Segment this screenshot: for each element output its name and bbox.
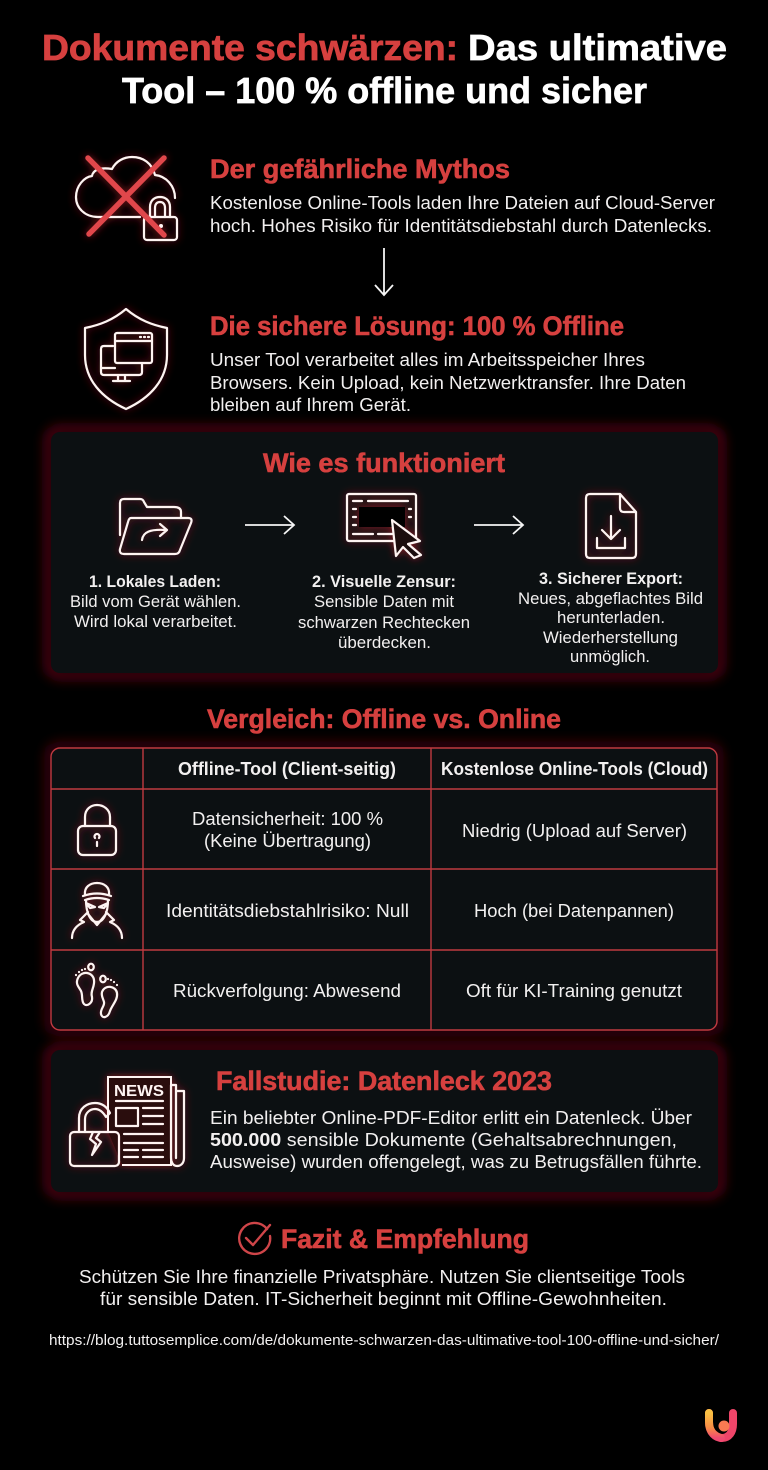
table header: Kostenlose Online-Tools (Cloud) xyxy=(441,759,708,779)
icon: redacting window with cursor xyxy=(347,494,421,558)
text: step 1: 1. Lokales Laden: xyxy=(89,573,221,591)
title xyxy=(42,27,727,111)
text: safe solution: Die sichere Lösung: 100 % Offline xyxy=(210,311,624,341)
title: Das ultimative xyxy=(468,27,727,68)
text: step 1 xyxy=(70,573,241,631)
text: step 3: herunterladen. xyxy=(557,609,665,627)
table header xyxy=(178,759,708,779)
icon: open folder xyxy=(120,499,192,554)
text: step 3: Wiederherstellung xyxy=(543,629,678,647)
text: conclusion: Schützen Sie Ihre finanzielle Privatsphäre. Nutzen Sie clientseitige Tools xyxy=(79,1266,685,1287)
panel: case study xyxy=(49,1048,720,1194)
icon: footprints xyxy=(76,964,117,1017)
text: step 3: Neues, abgeflachtes Bild xyxy=(518,590,703,608)
text: dangerous myth: Kostenlose Online-Tools laden Ihre Dateien auf Cloud-Server xyxy=(210,192,715,213)
row: traceability: Oft für KI-Training genutzt xyxy=(466,981,682,1001)
arrow: myth to solution xyxy=(375,248,393,295)
text: step 3: 3. Sicherer Export: xyxy=(539,570,683,588)
text: step 1: Bild vom Gerät wählen. xyxy=(70,593,241,611)
text: step 2: überdecken. xyxy=(338,634,431,652)
text: dangerous myth xyxy=(210,154,715,236)
icon: check mark circle xyxy=(239,1223,270,1254)
panel: how it works xyxy=(49,430,720,675)
row: data security: Datensicherheit: 100 % xyxy=(192,809,383,829)
row: identity theft risk: Identitätsdiebstahlrisiko: Null xyxy=(166,901,409,921)
text: case study: 500.000 sensible Dokumente (Gehaltsabrechnungen, xyxy=(210,1129,677,1150)
row: identity theft risk: Hoch (bei Datenpannen) xyxy=(474,901,674,921)
table header: Offline-Tool (Client-seitig) xyxy=(178,759,396,779)
row: identity theft risk xyxy=(166,901,674,921)
text: step 3: unmöglich. xyxy=(570,648,650,666)
text: step 2: 2. Visuelle Zensur: xyxy=(312,573,456,591)
row: data security: (Keine Übertragung) xyxy=(204,831,371,851)
text: step 2: Sensible Daten mit xyxy=(314,593,454,611)
arrow: step 1 to 2 xyxy=(245,516,294,534)
text: conclusion: für sensible Daten. IT-Sicherheit beginnt mit Offline-Gewohnheiten. xyxy=(100,1288,667,1309)
heading: conclusion: Fazit & Empfehlung xyxy=(281,1224,529,1254)
row: data security xyxy=(192,809,687,851)
title: Tool – 100 % offline und sicher xyxy=(122,70,647,111)
row: traceability xyxy=(173,981,682,1001)
text: case study xyxy=(210,1066,702,1172)
heading: how it works: Wie es funktioniert xyxy=(263,448,505,478)
text: safe solution: bleiben auf Ihrem Gerät. xyxy=(210,394,411,415)
text: case study: Fallstudie: Datenleck 2023 xyxy=(216,1066,552,1096)
row: data security: Niedrig (Upload auf Server) xyxy=(462,821,687,841)
icon: document download xyxy=(586,494,636,558)
comparison table xyxy=(49,746,719,1032)
text: conclusion xyxy=(79,1266,685,1309)
heading: comparison: Vergleich: Offline vs. Online xyxy=(207,704,561,734)
text: safe solution: Unser Tool verarbeitet alles im Arbeitsspeicher Ihres xyxy=(210,349,645,370)
text: step 2: schwarzen Rechtecken xyxy=(298,614,470,632)
text: safe solution: Browsers. Kein Upload, kein Netzwerktransfer. Ihre Daten xyxy=(210,372,686,393)
text: dangerous myth: hoch. Hohes Risiko für Identitätsdiebstahl durch Datenlecks. xyxy=(210,215,712,236)
text: dangerous myth: Der gefährliche Mythos xyxy=(210,154,510,184)
text: step 3 xyxy=(518,570,703,666)
icon: masked thief xyxy=(72,883,122,938)
icon: logo xyxy=(709,1413,733,1438)
icon: newspaper with broken lock: NEWS xyxy=(114,1083,164,1100)
text: safe solution xyxy=(210,311,686,415)
icon: newspaper with broken lock xyxy=(70,1077,184,1166)
title: Dokumente schwärzen: xyxy=(42,27,458,68)
text: case study: Ein beliebter Online-PDF-Editor erlitt ein Datenleck. Über xyxy=(210,1107,692,1128)
icon: padlock xyxy=(78,805,116,855)
row: traceability: Rückverfolgung: Abwesend xyxy=(173,981,401,1001)
text: step 2 xyxy=(298,573,470,652)
source url: https://blog.tuttosemplice.com/de/dokumente-schwarzen-das-ultimative-tool-100-offline-und-sicher/ xyxy=(49,1333,720,1349)
arrow: step 2 to 3 xyxy=(474,516,523,534)
text: step 1: Wird lokal verarbeitet. xyxy=(74,613,237,631)
text: case study: Ausweise) wurden offengelegt, was zu Betrugsfällen führte. xyxy=(210,1151,702,1172)
icon: shield with computer xyxy=(85,309,167,409)
icon: cloud with lock crossed out xyxy=(76,157,177,240)
